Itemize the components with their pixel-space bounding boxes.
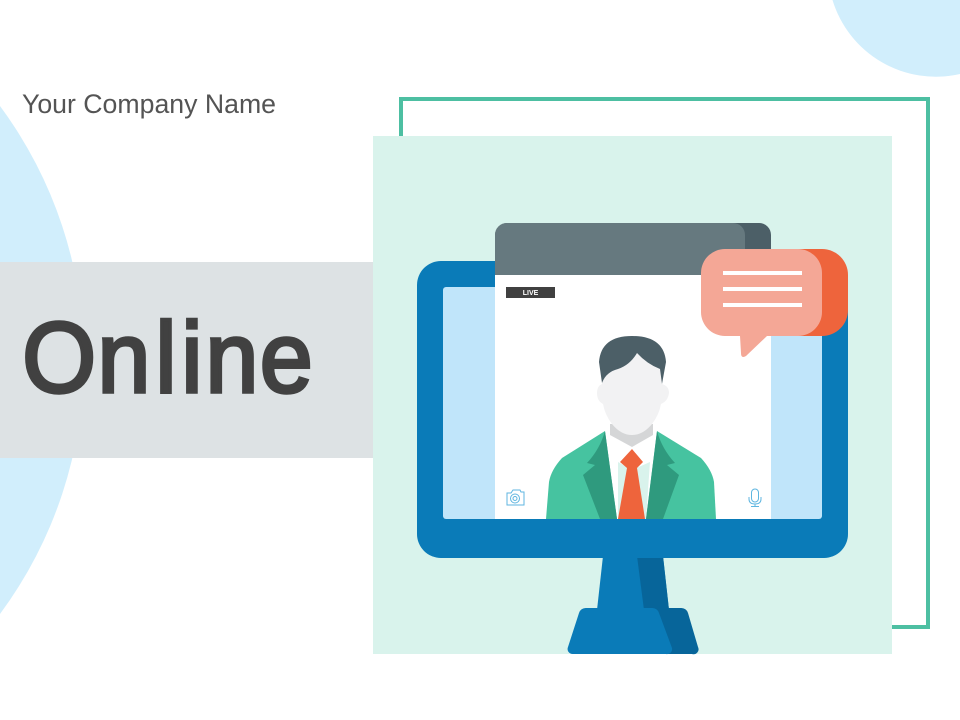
bubble shadow — [760, 249, 848, 336]
window body — [495, 275, 771, 519]
shirt — [605, 431, 657, 519]
decorative circle: top right — [832, 0, 960, 77]
speech bubble — [701, 249, 848, 357]
lapels — [583, 431, 617, 519]
suit — [546, 431, 716, 519]
bubble body — [701, 249, 822, 357]
video window — [495, 223, 771, 519]
collar shadow — [610, 424, 653, 447]
live badge — [506, 287, 555, 298]
person — [546, 336, 716, 519]
icon: monitor — [417, 261, 848, 558]
icon: camera — [507, 490, 524, 505]
hair — [599, 336, 666, 384]
icon: monitor stand — [568, 556, 699, 654]
tie — [618, 449, 645, 519]
bubble lines — [723, 271, 802, 307]
title: Online — [22, 302, 313, 414]
live badge: LIVE — [523, 290, 539, 297]
window header — [495, 223, 771, 275]
company name: Your Company Name — [22, 89, 276, 119]
decorative circle: left — [0, 106, 84, 614]
mint panel — [373, 136, 892, 654]
face — [597, 350, 669, 435]
green outline frame — [401, 99, 928, 627]
icon: microphone — [749, 489, 761, 506]
title band — [0, 262, 373, 458]
